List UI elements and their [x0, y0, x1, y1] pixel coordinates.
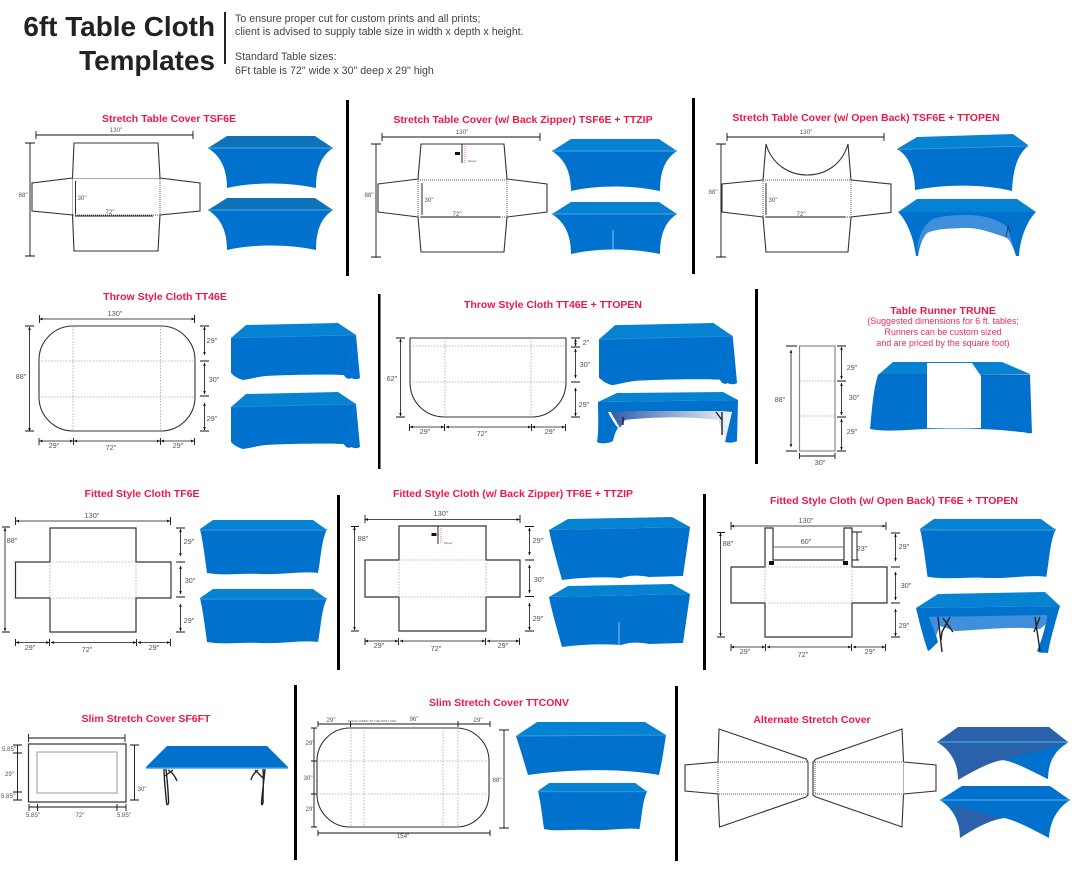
- template diagram: 88": [492, 777, 502, 784]
- template diagram: 29": [533, 614, 544, 623]
- template diagram: 5.85": [2, 746, 16, 753]
- template diagram: 29": [533, 536, 544, 545]
- heading: Fitted Style Cloth TF6E: [85, 488, 199, 500]
- template diagram: [303, 716, 509, 840]
- template diagram: 5.85": [26, 812, 40, 819]
- template diagram: 62": [387, 374, 398, 383]
- table render: front: [552, 139, 677, 191]
- template diagram: 88": [708, 189, 718, 196]
- template diagram: 88": [7, 536, 18, 545]
- template diagram: 23": [857, 544, 868, 553]
- table render: back: [231, 392, 360, 449]
- template diagram: 29": [149, 643, 160, 652]
- template diagram: [351, 509, 545, 653]
- panel: Fitted Style Cloth with Open Back: [717, 495, 1060, 659]
- template diagram: 30": [768, 197, 778, 204]
- template diagram: 29": [5, 771, 14, 778]
- panel: Throw Style Cloth TT46E: [16, 291, 360, 452]
- template diagram: 72": [105, 209, 115, 216]
- table render: short: [538, 783, 647, 830]
- template diagram: 29": [207, 414, 218, 423]
- template diagram: 29": [184, 616, 195, 625]
- table render: open back: [597, 392, 738, 443]
- table render: front: [920, 519, 1056, 578]
- template diagram: 29": [545, 427, 556, 436]
- template diagram: 96": [409, 716, 419, 723]
- template diagram: 72": [82, 645, 93, 654]
- template diagram: 130": [456, 129, 468, 136]
- heading: Fitted Style Cloth (w/ Back Zipper) TF6E + TTZIP: [393, 488, 633, 500]
- template diagram: 154": [397, 833, 409, 840]
- template diagram: 29": [498, 641, 509, 650]
- panel: Fitted Style Cloth with Back Zipper: [351, 488, 690, 653]
- template diagram: 29": [847, 363, 858, 372]
- template diagram: 72": [477, 429, 488, 438]
- table render: long: [516, 722, 666, 775]
- table render: front: [231, 323, 360, 380]
- template diagram: 2": [583, 338, 590, 347]
- template diagram: 72": [796, 211, 806, 218]
- template diagram: 29": [173, 441, 184, 450]
- template diagram: 130": [799, 516, 814, 525]
- template diagram: 29": [305, 806, 315, 813]
- intro text block: [235, 13, 524, 77]
- heading: Slim Stretch Cover SF6FT: [82, 713, 211, 725]
- heading: Table Runner TRUNE: [890, 305, 996, 317]
- template diagram: 30": [209, 375, 220, 384]
- note text: (Suggested dimensions for 6 ft. tables;: [867, 316, 1019, 326]
- template diagram: 5.85": [1, 793, 15, 800]
- heading: Slim Stretch Cover TTCONV: [429, 697, 569, 709]
- panel: Alternate Stretch Cover: [685, 714, 1070, 838]
- panel: Slim Stretch Cover TTCONV: [303, 697, 666, 840]
- template diagram: 29": [184, 537, 195, 546]
- intro text block: client is advised to supply table size in width x depth x height.: [235, 26, 524, 38]
- panel: Slim Stretch Cover SF6FT: [1, 713, 288, 819]
- table render with white runner: [870, 362, 1032, 433]
- template diagram: 88": [358, 534, 369, 543]
- template diagram: 30": [424, 197, 434, 204]
- table render: open back: [898, 199, 1036, 256]
- heading: Stretch Table Cover (w/ Back Zipper) TSF6E + TTZIP: [393, 114, 653, 126]
- template diagram: 29": [374, 641, 385, 650]
- template diagram: 29": [25, 643, 36, 652]
- intro text block: Standard Table sizes:: [235, 51, 337, 63]
- heading: Fitted Style Cloth (w/ Open Back) TF6E + TTOPEN: [770, 495, 1018, 507]
- template diagram: 30": [137, 786, 147, 793]
- template diagram: 29": [305, 740, 315, 747]
- table render: open back: [916, 592, 1060, 653]
- template diagram: 130": [434, 509, 449, 518]
- template diagram: 29": [899, 542, 910, 551]
- template diagram: 29": [579, 400, 590, 409]
- table render: front: [200, 520, 327, 574]
- template diagram: 30": [303, 775, 313, 782]
- template diagram: 30": [901, 581, 912, 590]
- template diagram: Zipper: [468, 159, 477, 163]
- template diagram: 88": [16, 372, 27, 381]
- template diagram: 72": [798, 650, 809, 659]
- template diagram: 130": [85, 511, 100, 520]
- template diagram: 88": [775, 395, 786, 404]
- panel: Throw Style Cloth TT46E + TTOPEN: [387, 299, 738, 443]
- template diagram: [717, 516, 912, 659]
- panel: Stretch Table Cover with Back Zipper: [364, 114, 677, 257]
- template diagram: 29": [847, 427, 858, 436]
- template diagram: 88": [364, 192, 374, 199]
- template diagram: 60": [801, 537, 812, 546]
- heading: Alternate Stretch Cover: [753, 714, 871, 726]
- table render: front: [599, 323, 737, 385]
- template diagram: [16, 309, 220, 452]
- table render: front: [897, 134, 1028, 191]
- table render: back with zipper: [552, 202, 677, 254]
- template diagram: [708, 129, 891, 257]
- template diagram: 30": [185, 576, 196, 585]
- table render: panel front: [937, 727, 1068, 780]
- table render: back: [208, 198, 333, 250]
- template diagram: 72": [106, 443, 117, 452]
- table render: front: [208, 136, 333, 188]
- title: 6ft Table Cloth Templates: 6ft Table Cloth: [23, 11, 215, 42]
- template diagram: [2, 511, 196, 654]
- heading: Stretch Table Cover TSF6E: [102, 113, 236, 125]
- heading: Stretch Table Cover (w/ Open Back) TSF6E + TTOPEN: [732, 112, 1000, 124]
- table render: back: [200, 589, 327, 643]
- template diagram: [364, 129, 547, 257]
- template diagram: [387, 338, 591, 438]
- template diagram: [18, 127, 200, 256]
- heading: Throw Style Cloth TT46E: [103, 291, 227, 303]
- template diagram: 5.85": [117, 812, 131, 819]
- title: 6ft Table Cloth Templates: [23, 11, 215, 76]
- title: 6ft Table Cloth Templates: Templates: [79, 45, 215, 76]
- template diagram: 72": [75, 812, 85, 819]
- template diagram: 130": [110, 127, 122, 134]
- template diagram: 88": [723, 539, 734, 548]
- template diagram: FOLDS UNDER TO THE MOST LINE: [348, 719, 396, 723]
- template diagram: 30": [534, 575, 545, 584]
- template diagram: 88": [18, 192, 28, 199]
- panel: Stretch Table Cover TSF6E: [18, 113, 333, 256]
- note text: and are priced by the square foot): [876, 338, 1010, 348]
- template diagram: 29": [420, 427, 431, 436]
- template diagram: 72": [431, 644, 442, 653]
- template diagram: [685, 729, 936, 827]
- template diagram: Zipper: [444, 541, 453, 545]
- panel: Table Runner TRUNE: [775, 305, 1032, 467]
- table render: [146, 746, 288, 805]
- heading: Throw Style Cloth TT46E + TTOPEN: [464, 299, 642, 311]
- template diagram: 29": [473, 717, 483, 724]
- table render: back with zipper: [549, 584, 690, 647]
- template diagram: 130": [800, 129, 812, 136]
- panel: Stretch Table Cover with Open Back: [708, 112, 1036, 257]
- template diagram: 72": [452, 211, 462, 218]
- template diagram: [1, 734, 147, 819]
- note text: [867, 316, 1019, 348]
- table render: panel back: [940, 786, 1070, 838]
- template diagram: 29": [899, 621, 910, 630]
- panel: Fitted Style Cloth TF6E: [2, 488, 327, 654]
- table render: front: [549, 517, 690, 580]
- template diagram: 30": [77, 195, 87, 202]
- intro text block: To ensure proper cut for custom prints and all prints;: [235, 13, 480, 25]
- template diagram: 29": [740, 647, 751, 656]
- template diagram: [775, 346, 860, 467]
- template diagram: 29": [207, 336, 218, 345]
- note text: Runners can be custom sized: [885, 327, 1002, 337]
- intro text block: 6Ft table is 72" wide x 30" deep x 29" high: [235, 65, 434, 77]
- template diagram: 30": [580, 360, 591, 369]
- template diagram: 130": [108, 309, 123, 318]
- template diagram: 30": [849, 393, 860, 402]
- template diagram: 30": [815, 458, 826, 467]
- template diagram: 29": [49, 441, 60, 450]
- template diagram: 29": [326, 717, 336, 724]
- template diagram: 29": [865, 647, 876, 656]
